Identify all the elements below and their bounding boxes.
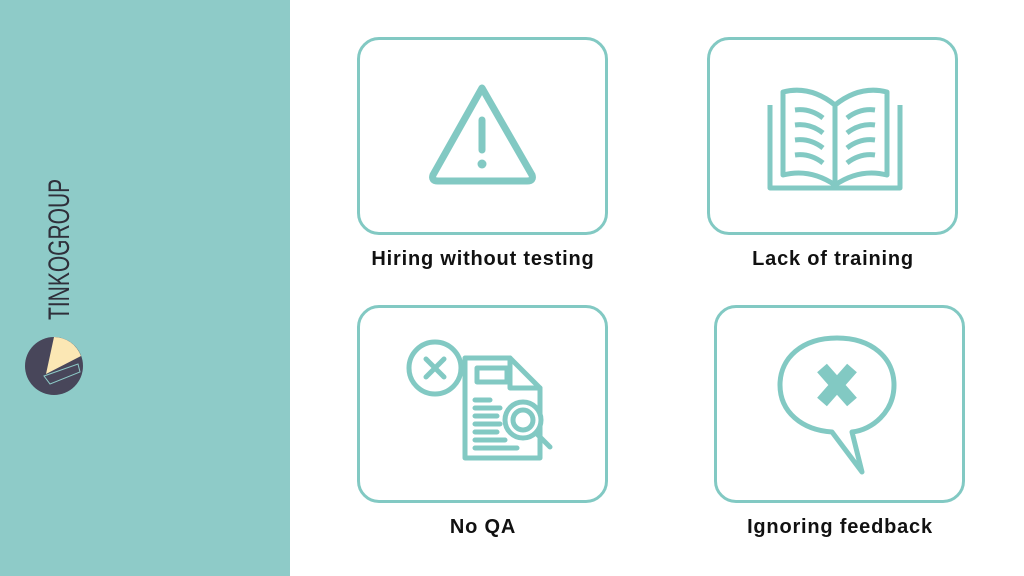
logo icon [25, 337, 83, 395]
sidebar [0, 0, 290, 576]
icon: open book [768, 88, 902, 190]
panel: no QA [357, 305, 608, 503]
panel: lack of training [707, 37, 958, 235]
icon: warning triangle [429, 84, 536, 184]
logo text: TINKOGROUP [43, 179, 76, 320]
label: no QA: No QA [450, 516, 516, 538]
label: feedback: Ignoring feedback [747, 516, 933, 538]
panel: hiring without testing [357, 37, 608, 235]
panel: ignoring feedback [714, 305, 965, 503]
icon: document with x and magnifier [406, 340, 552, 460]
label: hiring: Hiring without testing [371, 248, 595, 270]
icon: speech bubble with x [778, 336, 896, 474]
label: training: Lack of training [752, 248, 914, 270]
